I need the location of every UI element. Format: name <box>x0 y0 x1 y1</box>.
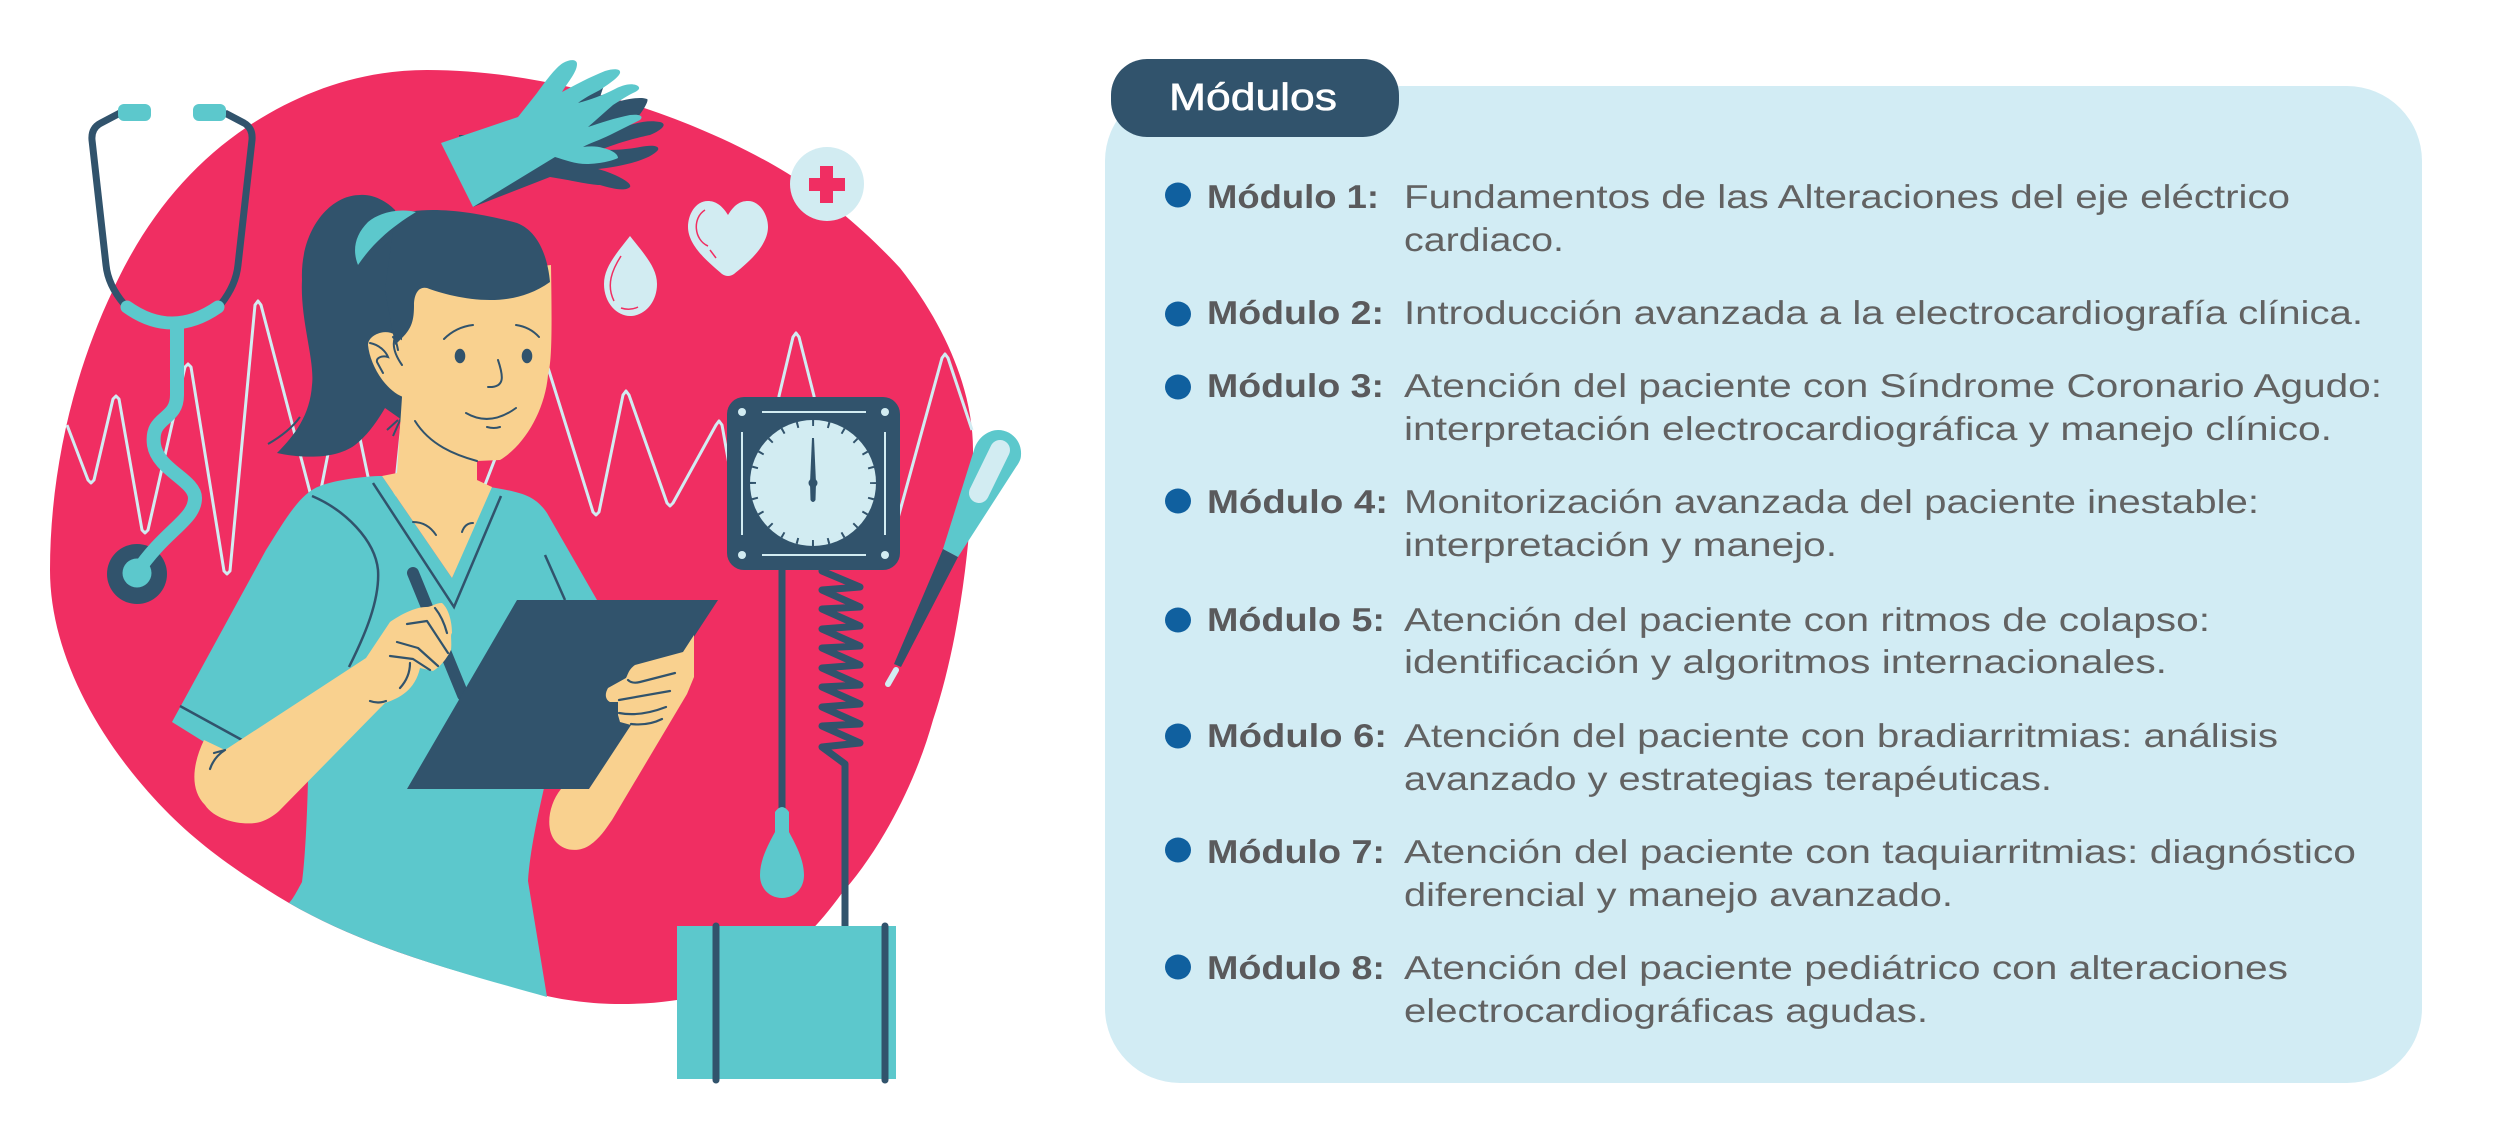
module 3: Atención del paciente con Síndrome Coronario Agudo: <box>1404 367 2382 404</box>
module 8: electrocardiográficas agudas. <box>1404 992 1928 1029</box>
module 1: Fundamentos de las Alteraciones del eje eléctrico <box>1404 178 2290 215</box>
squeeze bulb <box>760 807 804 898</box>
icon: medical cross badge <box>790 147 864 221</box>
icon: stethoscope <box>92 104 252 604</box>
module 5: Módulo 5: <box>1207 601 1385 638</box>
coiled tube <box>822 571 860 926</box>
hair tie <box>355 210 416 265</box>
module 7: Atención del paciente con taquiarritmias: diagnóstico <box>1404 833 2356 870</box>
module 1: cardiaco. <box>1404 221 1564 258</box>
neck and face <box>382 265 552 578</box>
gauge trim <box>738 408 889 559</box>
module 7 <box>1165 833 2356 913</box>
module 1: Módulo 1: <box>1207 178 1379 215</box>
module 3: interpretación electrocardiográfica y manejo clínico. <box>1404 410 2332 447</box>
finger lines <box>619 673 675 724</box>
module 4: Módulo 4: <box>1207 483 1388 520</box>
module 2: Módulo 2: <box>1207 294 1384 331</box>
module 7: diferencial y manejo avanzado. <box>1404 876 1953 913</box>
icon: inflatable cuff <box>677 926 896 1080</box>
module 6: avanzado y estrategias terapéuticas. <box>1404 760 2052 797</box>
module 2 <box>1165 294 2363 331</box>
module 6: Atención del paciente con bradiarritmias: análisis <box>1404 717 2278 754</box>
clipboard <box>407 600 718 789</box>
module 6: Módulo 6: <box>1207 717 1387 754</box>
module 4: Monitorización avanzada del paciente inestable: <box>1404 483 2259 520</box>
gauge dial <box>750 420 876 546</box>
pen <box>413 573 463 695</box>
icon: water drop <box>604 236 657 316</box>
icon: glove <box>441 60 664 207</box>
nurse figure <box>172 195 718 997</box>
module 3 <box>1165 367 2382 447</box>
module 3: Módulo 3: <box>1207 367 1384 404</box>
red background blob <box>50 70 973 1004</box>
dial needle <box>810 438 816 502</box>
icon: blood pressure gauge <box>727 397 900 926</box>
module 8: Atención del paciente pediátrico con alteraciones <box>1404 949 2288 986</box>
module 2: Introducción avanzada a la electrocardiografía clínica. <box>1404 294 2363 331</box>
hair top <box>385 210 550 345</box>
right arm and hand <box>549 635 694 850</box>
dial ticks <box>753 423 873 543</box>
module 1 <box>1165 178 2290 258</box>
facial features <box>370 325 539 535</box>
ear <box>368 332 408 397</box>
icon: heart <box>688 201 768 276</box>
module 5: Atención del paciente con ritmos de colapso: <box>1404 601 2210 638</box>
hose to bulb <box>778 570 786 810</box>
ponytail <box>277 195 420 457</box>
module 4: interpretación y manejo. <box>1404 526 1837 563</box>
illustration: nurse with medical equipment <box>50 60 1021 1080</box>
module 7: Módulo 7: <box>1207 833 1385 870</box>
panel background <box>1105 86 2422 1083</box>
module 8 <box>1165 949 2288 1029</box>
hand lines <box>210 608 448 769</box>
module 4 <box>1165 483 2259 563</box>
gauge housing <box>727 397 900 570</box>
module 5 <box>1165 601 2210 680</box>
left arm and writing hand <box>194 603 452 823</box>
module 5: identificación y algoritmos internacionales. <box>1404 643 2167 680</box>
hair wisps <box>268 417 401 444</box>
icon: thermometer <box>888 430 1021 684</box>
scrubs top <box>172 476 597 997</box>
panel: modules <box>1105 59 2422 1083</box>
heading text: Módulos <box>1169 77 1337 119</box>
module 6 <box>1165 717 2278 797</box>
scrubs seams <box>180 483 565 740</box>
heartbeat line <box>67 301 972 574</box>
module 8: Módulo 8: <box>1207 949 1385 986</box>
heading pill <box>1111 59 1399 137</box>
